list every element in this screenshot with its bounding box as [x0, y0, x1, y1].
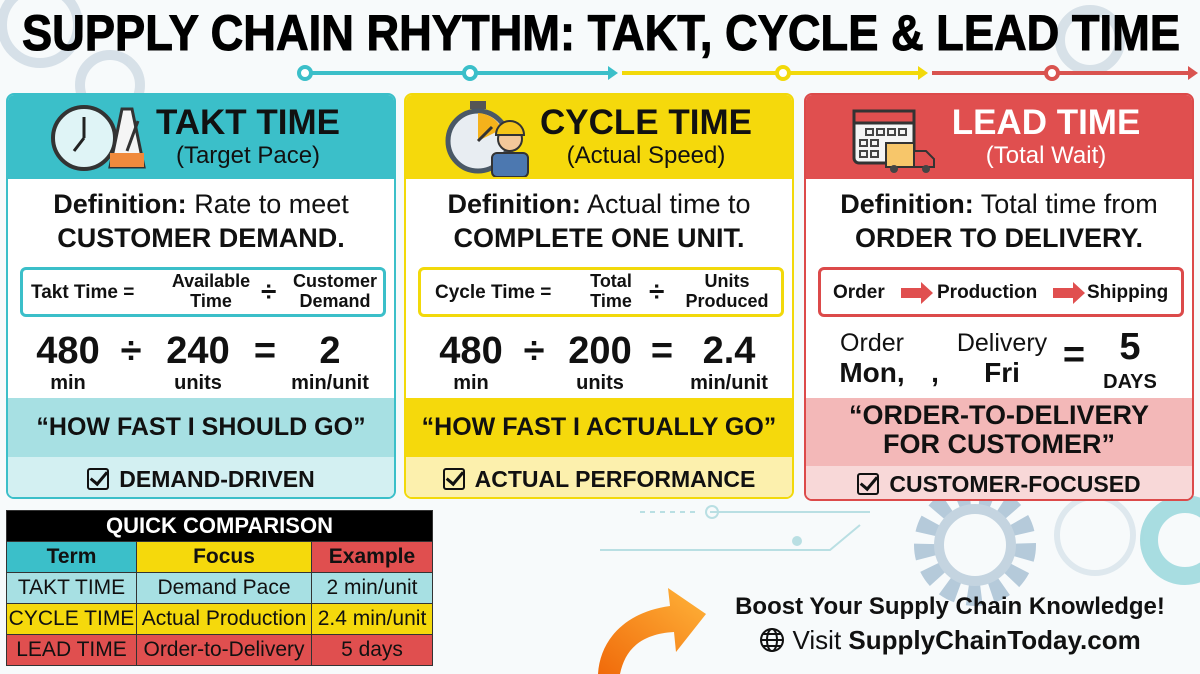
lead quote: FOR CUSTOMER” — [883, 429, 1115, 459]
panel: lead time: 5 — [1119, 326, 1141, 368]
cycle tag: ACTUAL PERFORMANCE — [475, 466, 755, 492]
panel: lead time: Fri — [984, 357, 1020, 388]
takt formula box: ÷ — [261, 276, 276, 307]
lead subtitle: (Total Wait) — [986, 142, 1106, 169]
quick comparison table: CYCLE TIME — [9, 607, 134, 630]
cycle tag — [406, 457, 792, 501]
quick comparison table: 5 days — [341, 638, 403, 661]
panel: takt time: min/unit — [291, 372, 369, 394]
icon: calendar and truck — [852, 110, 935, 173]
takt formula box: Customer — [293, 271, 377, 291]
icon: clock and metronome — [51, 105, 146, 171]
call to action: Boost Your Supply Chain Knowledge! — [735, 593, 1165, 620]
cycle title: CYCLE TIME — [540, 103, 752, 142]
panel: lead time: Delivery — [957, 329, 1047, 357]
quick comparison table: Demand Pace — [157, 576, 291, 599]
lead title: LEAD TIME — [952, 103, 1140, 142]
lead quote: “ORDER-TO-DELIVERY — [849, 400, 1149, 430]
takt tag: DEMAND-DRIVEN — [119, 466, 315, 492]
takt title: TAKT TIME — [156, 103, 340, 142]
cycle formula box: Total — [590, 271, 632, 291]
lead tag — [806, 466, 1192, 503]
arrow: orange curved — [598, 588, 706, 674]
quick comparison table — [6, 510, 433, 666]
quick comparison table: TAKT TIME — [18, 576, 125, 599]
panel: cycle time — [404, 93, 794, 499]
quick comparison table: 2 min/unit — [326, 576, 418, 599]
panel: lead time — [804, 93, 1194, 501]
lead definition: ORDER TO DELIVERY. — [855, 223, 1143, 253]
panel: takt time: min — [50, 372, 86, 394]
takt calculation — [36, 330, 369, 394]
takt quote: “HOW FAST I SHOULD GO” — [36, 413, 366, 441]
quick comparison table: Example — [329, 545, 415, 568]
quick comparison table: 2.4 min/unit — [318, 607, 426, 630]
timeline arrows — [297, 65, 1198, 81]
panel: cycle time: 200 — [568, 330, 632, 372]
cycle quote: “HOW FAST I ACTUALLY GO” — [422, 413, 776, 441]
panel: lead time: Mon, — [839, 357, 905, 388]
panel: takt time: 240 — [166, 330, 230, 372]
lead definition — [840, 189, 1158, 253]
quick comparison table: Actual Production — [142, 607, 306, 630]
lead calculation — [839, 326, 1157, 393]
lead header — [806, 95, 1192, 179]
website link with globe icon: Visit SupplyChainToday.com — [793, 625, 1141, 655]
panel: takt time: units — [174, 372, 222, 394]
panel: cycle time: 2.4 — [703, 330, 755, 372]
takt header — [8, 95, 394, 179]
quick comparison table: QUICK COMPARISON — [106, 513, 333, 538]
icon: stopwatch and worker — [446, 101, 529, 177]
cycle formula box: ÷ — [649, 276, 664, 307]
quick comparison table: Order-to-Delivery — [143, 638, 305, 661]
lead tag: CUSTOMER-FOCUSED — [889, 471, 1141, 497]
cycle subtitle: (Actual Speed) — [567, 142, 725, 169]
takt definition: CUSTOMER DEMAND. — [57, 223, 345, 253]
quick comparison table: Focus — [193, 545, 255, 568]
takt formula box: Time — [190, 291, 232, 311]
takt tag — [8, 457, 394, 501]
panel: takt time — [6, 93, 396, 499]
lead process box — [818, 267, 1184, 317]
lead definition: Definition: Total time from — [840, 189, 1158, 219]
takt formula box — [20, 267, 386, 317]
panel: lead time: Order — [840, 329, 904, 357]
lead process box: Production — [937, 282, 1037, 303]
takt formula box: Available — [172, 271, 250, 291]
panel: lead time: = — [1063, 334, 1085, 376]
quick comparison table: LEAD TIME — [16, 638, 127, 661]
cycle quote — [406, 398, 792, 457]
cycle definition: COMPLETE ONE UNIT. — [453, 223, 744, 253]
lead quote — [806, 398, 1192, 466]
takt definition — [53, 189, 349, 253]
takt formula box: Takt Time = — [31, 282, 134, 303]
cycle definition — [447, 189, 751, 253]
lead process box: Shipping — [1087, 282, 1168, 303]
cycle formula box: Produced — [685, 291, 768, 311]
cycle calculation — [439, 330, 768, 394]
panel: cycle time: ÷ — [524, 330, 544, 372]
quick comparison table: Term — [47, 545, 96, 568]
takt quote — [8, 398, 394, 457]
takt subtitle: (Target Pace) — [176, 142, 320, 169]
panel: cycle time: 480 — [439, 330, 503, 372]
panel: cycle time: min/unit — [690, 372, 768, 394]
panel: lead time: , — [931, 357, 939, 388]
panel: cycle time: units — [576, 372, 624, 394]
panel: cycle time: min — [453, 372, 489, 394]
cycle definition: Definition: Actual time to — [447, 189, 751, 219]
panel: takt time: 2 — [319, 330, 341, 372]
takt formula box: Demand — [299, 291, 370, 311]
takt definition: Definition: Rate to meet — [53, 189, 349, 219]
cycle formula box: Time — [590, 291, 632, 311]
panel: cycle time: = — [651, 330, 673, 372]
cycle header — [406, 95, 792, 179]
lead process box: Order — [833, 282, 885, 303]
cycle formula box: Units — [704, 271, 750, 291]
cycle formula box: Cycle Time = — [435, 282, 551, 303]
panel: takt time: ÷ — [121, 330, 141, 372]
panel: takt time: 480 — [36, 330, 100, 372]
panel: lead time: DAYS — [1103, 371, 1157, 393]
panel: takt time: = — [254, 330, 276, 372]
cycle formula box — [418, 267, 784, 317]
